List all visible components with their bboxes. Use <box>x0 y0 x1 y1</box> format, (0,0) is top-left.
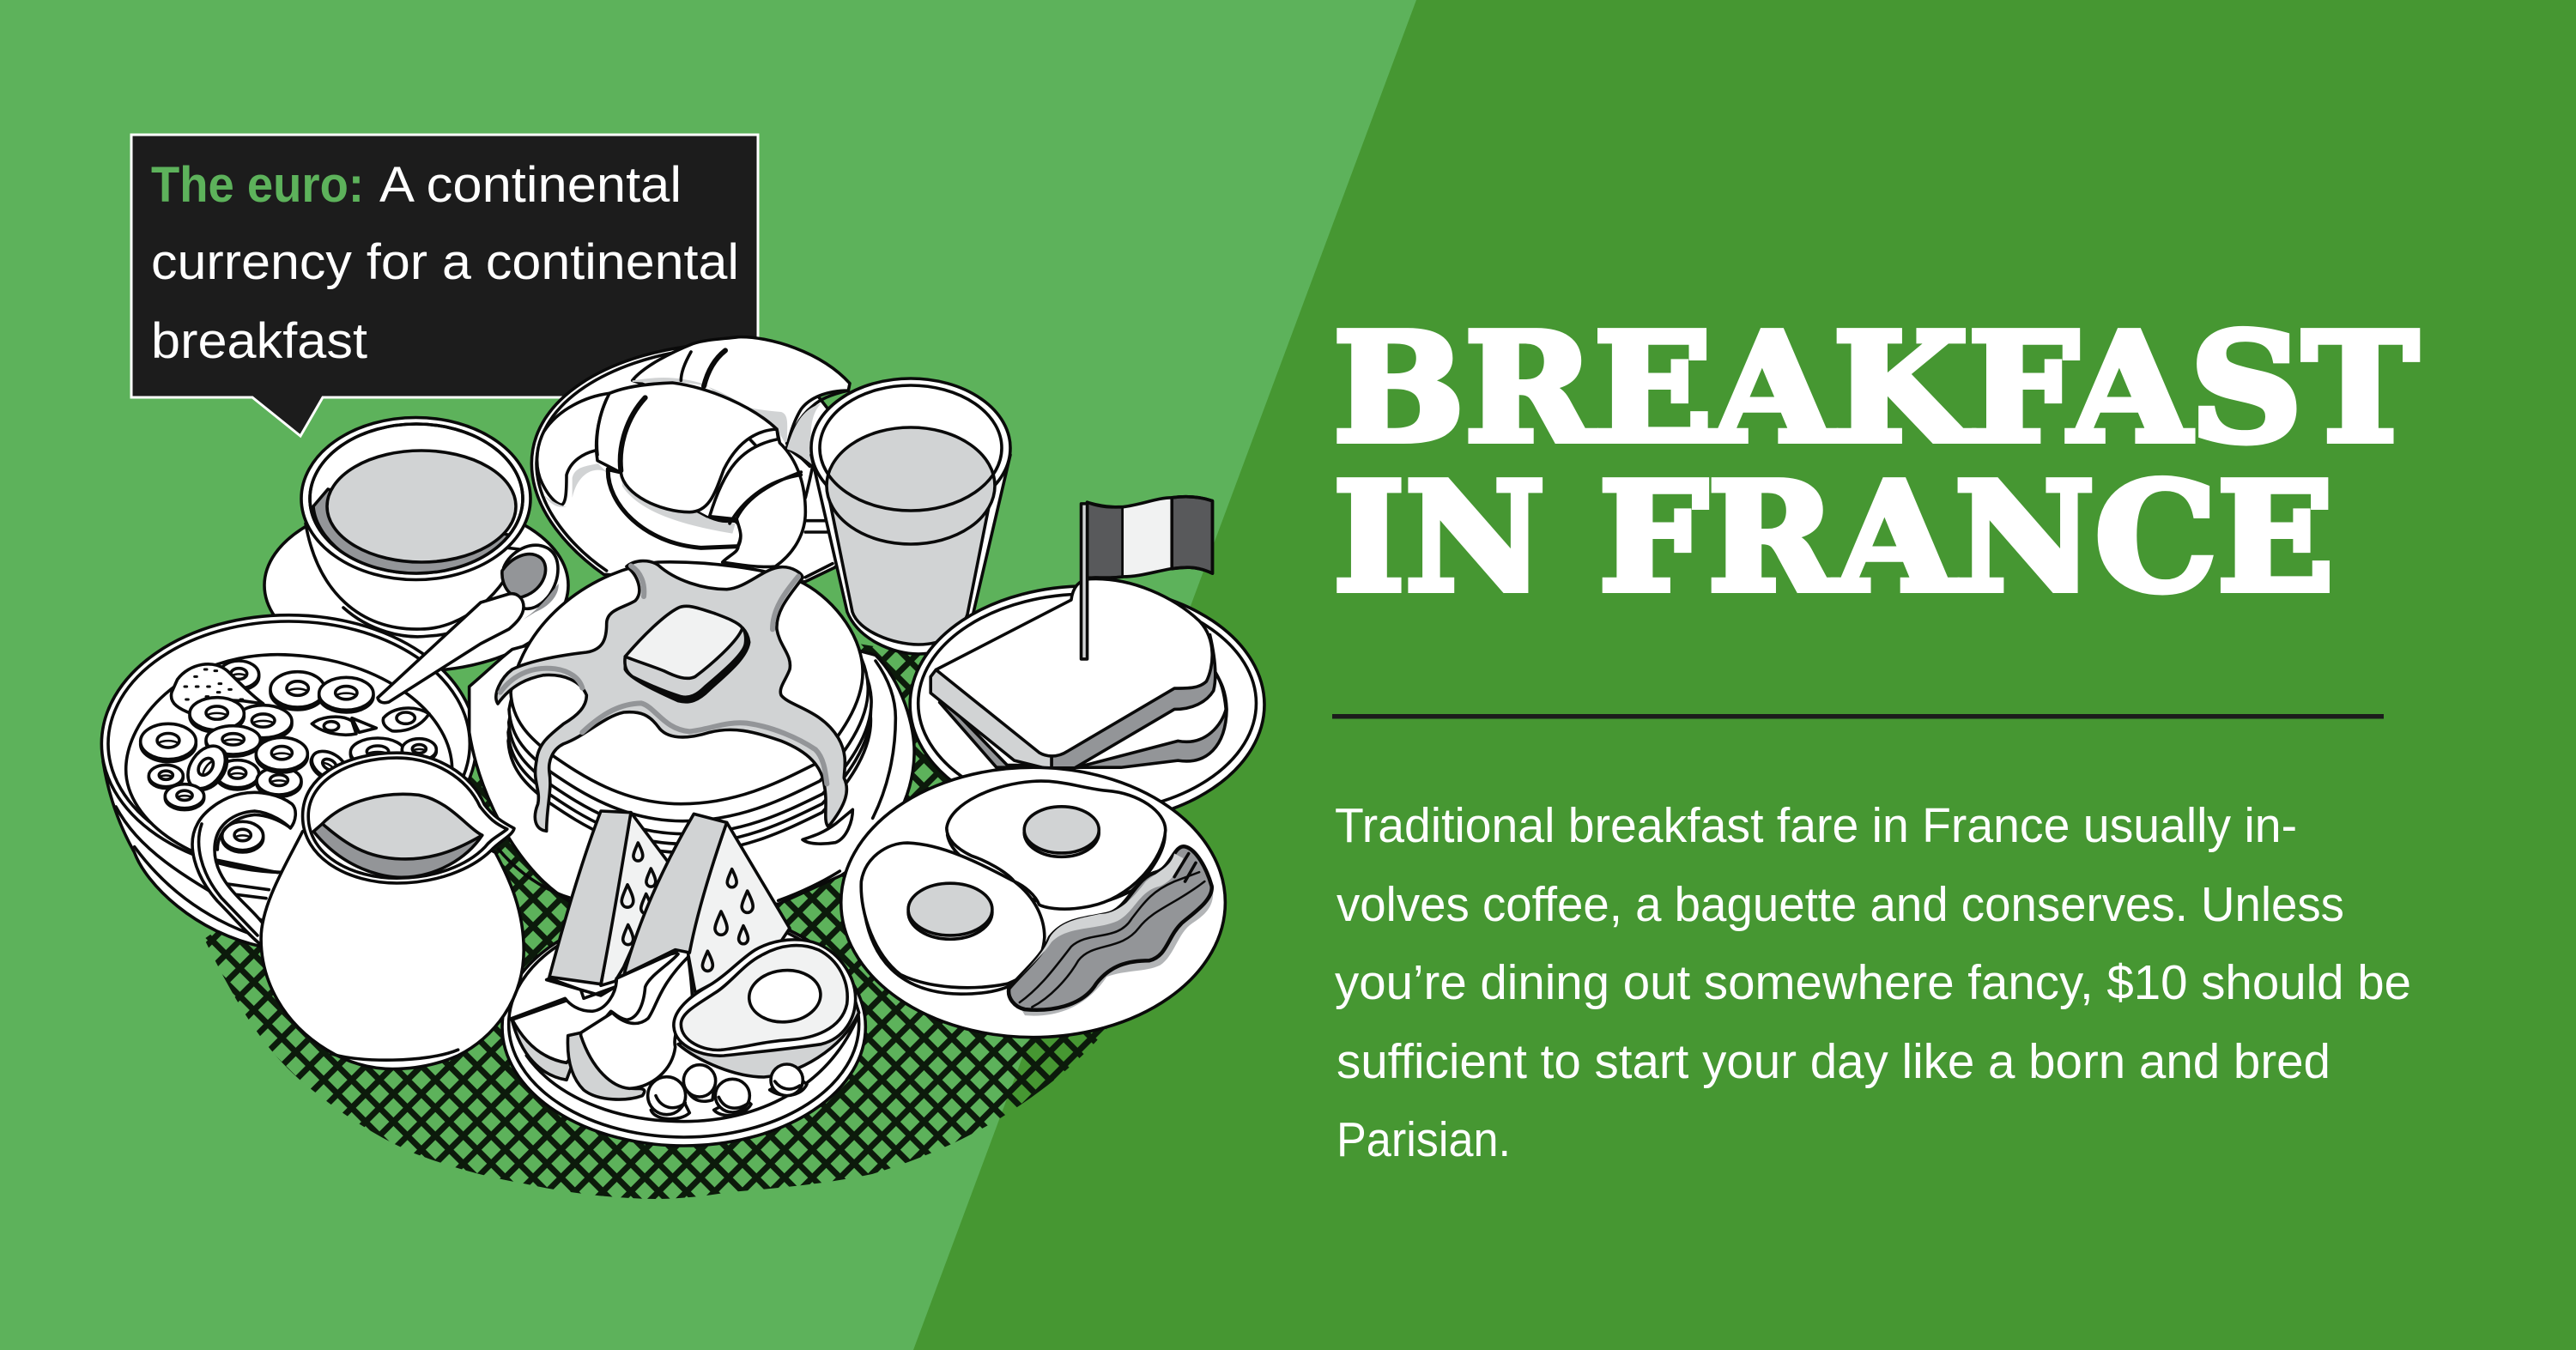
coffee cup and saucer <box>264 417 568 671</box>
eggs and bacon plate <box>841 767 1225 1038</box>
stacked pancakes <box>508 562 871 852</box>
croissants on plate <box>531 337 859 584</box>
watermelon slices <box>547 811 790 998</box>
syrup pool <box>803 809 852 844</box>
cereal rings <box>141 661 436 852</box>
body text: sufficient to start your day like a born and bred <box>1336 1034 2331 1089</box>
bacon strips <box>1009 846 1213 1016</box>
body text <box>1335 798 2411 1167</box>
spoon handle <box>378 594 524 703</box>
butter <box>625 606 749 702</box>
milk jug handle <box>192 792 295 946</box>
nuts <box>648 1064 807 1119</box>
cereal bowl <box>101 615 476 947</box>
fried egg back <box>947 781 1166 909</box>
title: IN FRANCE <box>1333 451 2334 626</box>
callout: the euro speech bubble: breakfast <box>151 313 367 369</box>
callout: the euro speech bubble: The euro: <box>151 157 364 213</box>
icon: French flag <box>1082 497 1212 659</box>
fried egg front <box>861 843 1045 994</box>
milk jug <box>261 753 524 1069</box>
halftone hatch shadow under the food <box>204 644 1150 1199</box>
illustration: breakfast table <box>101 337 1264 1146</box>
divider rule <box>1332 714 2384 719</box>
callout: the euro speech bubble: currency for a continental <box>151 234 739 290</box>
pancakes with syrup and butter on plate <box>470 561 914 904</box>
avocado half <box>674 940 859 1077</box>
body text: volves coffee, a baguette and conserves. Unless <box>1336 877 2344 932</box>
syrup <box>496 561 846 831</box>
apple slices <box>512 951 693 1099</box>
fruit plate: watermelon, apple, avocado, nuts <box>502 811 865 1146</box>
callout: the euro speech bubble <box>131 135 758 436</box>
title: BREAKFAST <box>1333 301 2418 476</box>
glass of juice <box>811 378 1010 654</box>
toast plate and flag <box>910 497 1264 823</box>
spoon bowl and cup handle <box>502 545 559 620</box>
body text: Parisian. <box>1336 1112 1511 1167</box>
body text: you’re dining out somewhere fancy, $10 should be <box>1335 955 2411 1010</box>
callout: the euro speech bubble: A continental <box>379 157 682 213</box>
title <box>1333 301 2418 626</box>
body text: Traditional breakfast fare in France usually in- <box>1335 798 2297 853</box>
background: dark green diagonal panel <box>913 0 2576 1350</box>
strawberry <box>171 664 264 714</box>
